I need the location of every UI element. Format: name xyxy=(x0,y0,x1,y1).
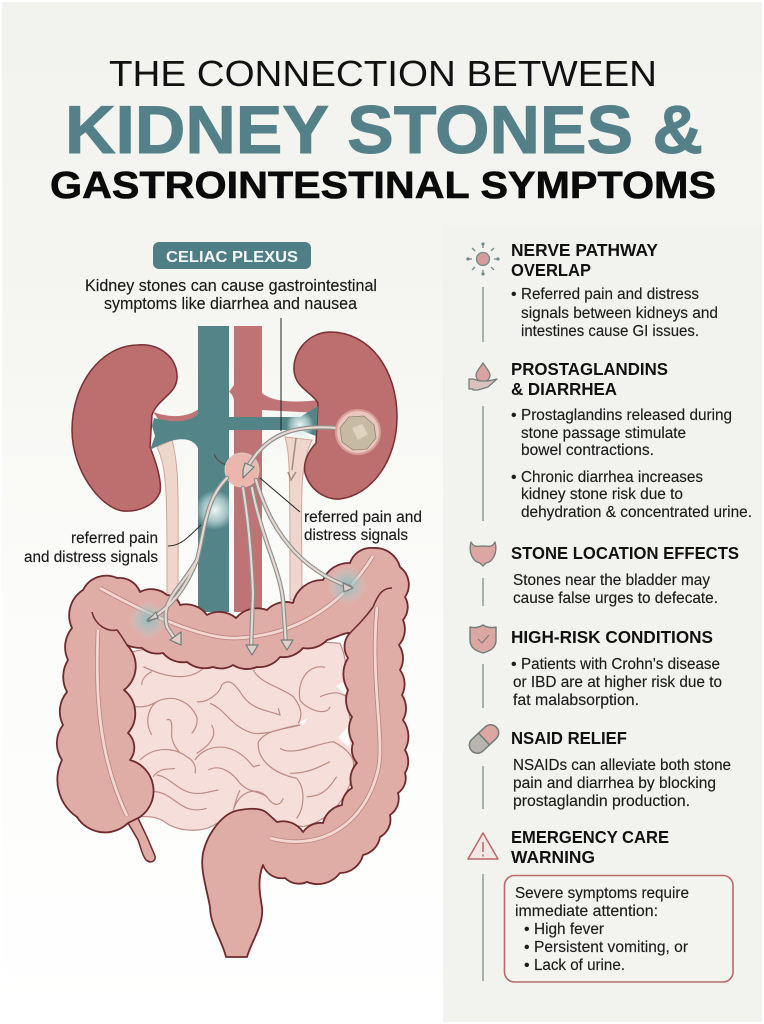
label: referred pain left xyxy=(24,525,201,566)
section: emergency xyxy=(483,827,733,982)
diagram caption: symptoms like diarrhea and nausea xyxy=(104,295,358,313)
left kidney xyxy=(72,345,177,511)
section: prostaglandins: Chronic diarrhea increases xyxy=(521,469,703,486)
stone pointer xyxy=(280,318,282,431)
vena cava xyxy=(150,326,318,612)
small intestine xyxy=(122,641,355,830)
panel: right column background xyxy=(443,225,762,1022)
nerve pathways xyxy=(149,427,350,650)
section: nsaid: pain and diarrhea by blocking xyxy=(513,775,716,792)
section: prostaglandins: • xyxy=(511,407,517,424)
section: nerve pathway: OVERLAP xyxy=(511,260,591,280)
section: prostaglandins: stone passage stimulate xyxy=(521,425,686,442)
section: nsaid: NSAID RELIEF xyxy=(511,728,627,748)
colon folds xyxy=(92,588,392,645)
section: high-risk: HIGH-RISK CONDITIONS xyxy=(511,627,713,647)
label: referred pain right xyxy=(260,478,422,544)
section: nerve pathway: • xyxy=(511,286,517,303)
badge: celiac plexus xyxy=(153,242,311,269)
callout: Severe symptoms require xyxy=(515,885,689,902)
section: stone location: Stones near the bladder may xyxy=(513,572,710,589)
section: prostaglandins: kidney stone risk due to xyxy=(521,486,683,503)
callout: immediate attention: xyxy=(515,903,658,920)
section: prostaglandins: Prostaglandins released during xyxy=(521,407,732,424)
section: prostaglandins: & DIARRHEA xyxy=(511,379,617,399)
nerve arrowheads xyxy=(147,463,353,655)
callout: • xyxy=(524,939,530,956)
section: nerve pathway: intestines cause GI issues. xyxy=(521,323,699,340)
right kidney xyxy=(294,332,397,499)
section: emergency: WARNING xyxy=(511,847,595,867)
icon: drop and hand xyxy=(469,363,497,390)
callout: • xyxy=(524,921,530,938)
label: referred pain right: distress signals xyxy=(304,527,408,544)
section: stone location xyxy=(483,543,739,607)
title: KIDNEY STONES & xyxy=(65,92,703,168)
badge: celiac plexus: CELIAC PLEXUS xyxy=(166,249,298,266)
title xyxy=(50,53,716,207)
title: GASTROINTESTINAL SYMPTOMS xyxy=(50,165,716,207)
callout: Lack of urine. xyxy=(534,957,625,974)
section: nerve pathway: NERVE PATHWAY xyxy=(511,240,658,260)
section: high-risk: or IBD are at higher risk due to xyxy=(513,674,722,691)
title: THE CONNECTION BETWEEN xyxy=(109,53,657,94)
section: nsaid: NSAIDs can alleviate both stone xyxy=(513,757,731,774)
callout xyxy=(504,876,733,982)
section: high-risk: Patients with Crohn's disease xyxy=(521,656,720,673)
large intestine xyxy=(57,548,409,957)
small ureter arrow xyxy=(288,438,296,480)
section: nerve pathway xyxy=(483,240,718,342)
section: nerve pathway: Referred pain and distress xyxy=(521,286,699,303)
ganglion xyxy=(214,453,259,487)
section: prostaglandins: • xyxy=(511,469,517,486)
left renal artery xyxy=(153,408,200,428)
section: prostaglandins: bowel contractions. xyxy=(521,442,654,459)
colon outline xyxy=(57,548,409,957)
aorta xyxy=(229,326,319,612)
section: high-risk: • xyxy=(511,656,517,673)
callout: • xyxy=(524,957,530,974)
section: prostaglandins xyxy=(483,359,752,521)
section: stone location: STONE LOCATION EFFECTS xyxy=(511,543,739,563)
section: nsaid: prostaglandin production. xyxy=(513,793,690,810)
icon: shield xyxy=(470,625,496,653)
anatomy: vessels and kidneys xyxy=(72,326,397,612)
section: high-risk xyxy=(483,627,722,709)
label: referred pain left: and distress signals xyxy=(24,549,158,566)
label: referred pain right: referred pain and xyxy=(304,509,422,526)
section: emergency: EMERGENCY CARE xyxy=(511,827,669,847)
icon: bladder xyxy=(470,542,496,566)
appendix xyxy=(128,818,155,862)
kidney stone xyxy=(336,410,380,454)
label: referred pain left: referred pain xyxy=(71,530,158,547)
section: nsaid xyxy=(483,728,731,810)
icon: warning xyxy=(468,833,498,859)
section: prostaglandins: PROSTAGLANDINS xyxy=(511,359,668,379)
diagram caption xyxy=(85,277,377,313)
diagram caption: Kidney stones can cause gastrointestinal xyxy=(85,277,377,295)
section: prostaglandins: dehydration & concentrated urine. xyxy=(521,504,752,521)
section: high-risk: fat malabsorption. xyxy=(513,692,639,709)
glow spots xyxy=(129,411,367,639)
section: stone location: cause false urges to defecate. xyxy=(513,590,718,607)
callout: High fever xyxy=(534,921,605,938)
section: nerve pathway: signals between kidneys and xyxy=(521,305,718,322)
intestine gaps xyxy=(300,628,350,748)
callout: Persistent vomiting, or xyxy=(534,939,689,956)
icon: nerve xyxy=(467,243,499,275)
ureter right xyxy=(285,437,312,600)
colon inner band xyxy=(97,556,380,842)
ureter left xyxy=(157,440,178,600)
icon: pill xyxy=(466,722,502,756)
